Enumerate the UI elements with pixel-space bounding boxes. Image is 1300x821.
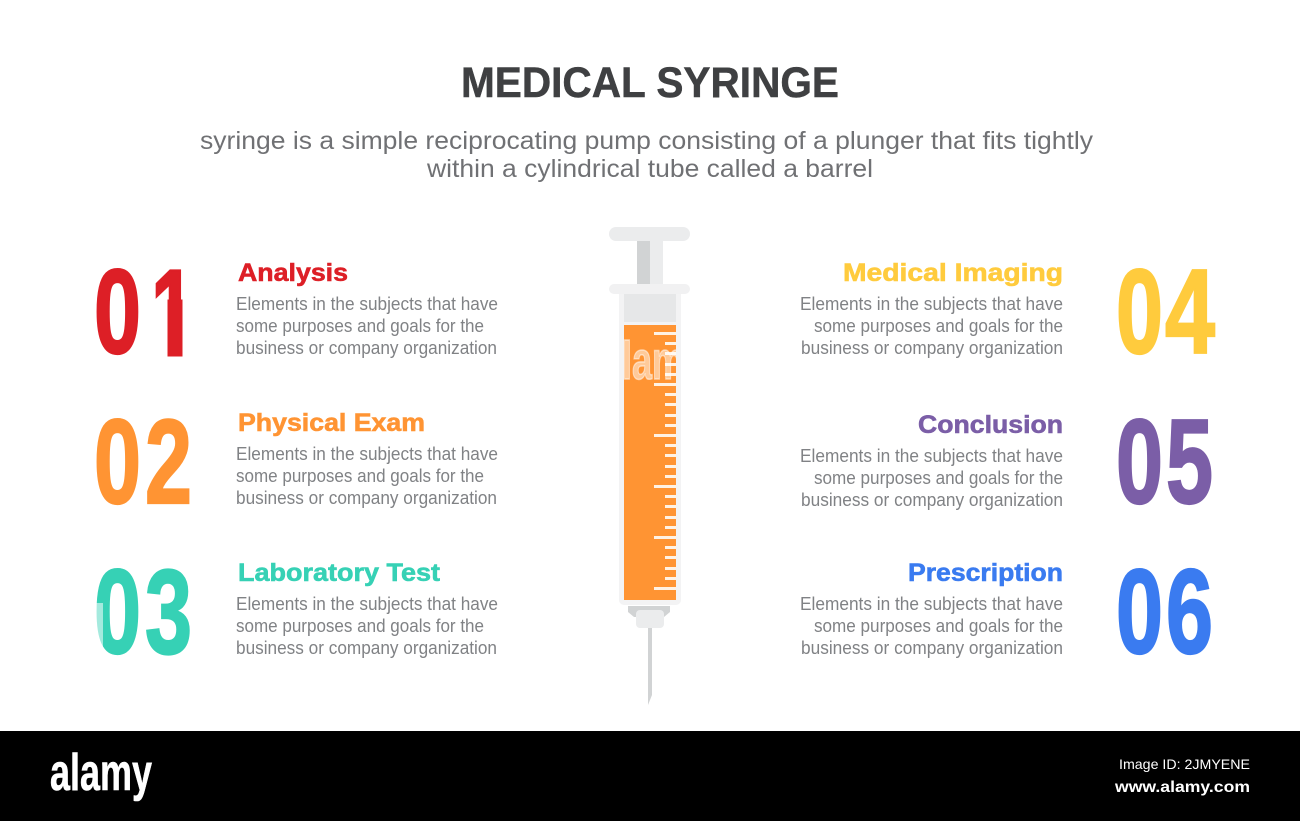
item 06: Prescription xyxy=(800,545,1213,679)
item 01: Analysis: Elements in the subjects that have xyxy=(236,293,498,314)
item 01: Analysis: business or company organization xyxy=(236,337,497,358)
item 02: Physical Exam: 0 xyxy=(94,395,141,529)
barrel flange xyxy=(609,284,690,294)
item 01: Analysis: 0 xyxy=(94,245,141,379)
item 02: Physical Exam: 2 xyxy=(145,395,192,529)
item 06: Prescription: 6 xyxy=(1166,545,1213,679)
item 04: Medical Imaging: 4 xyxy=(1165,245,1215,379)
item 06: Prescription: business or company organization xyxy=(801,637,1063,658)
item 04: Medical Imaging: 0 xyxy=(1116,245,1163,379)
item 05: Conclusion: some purposes and goals for the xyxy=(814,467,1063,488)
item 04: Medical Imaging: Elements in the subjects that have xyxy=(800,293,1063,314)
item 01: Analysis: Analysis xyxy=(238,259,348,287)
item 03: Laboratory Test: 3 xyxy=(145,545,192,679)
item 01: Analysis: 1 xyxy=(151,245,195,379)
footer bar xyxy=(0,731,1300,821)
item 05: Conclusion: Elements in the subjects that have xyxy=(800,445,1063,466)
item 06: Prescription: some purposes and goals for the xyxy=(814,615,1063,636)
icon: syringe xyxy=(609,227,690,705)
item 02: Physical Exam: business or company organization xyxy=(236,487,497,508)
item 02: Physical Exam: some purposes and goals for the xyxy=(236,465,484,486)
plunger seal xyxy=(624,294,676,322)
alamy logo: alamy xyxy=(50,744,152,802)
item 06: Prescription: Elements in the subjects that have xyxy=(800,593,1063,614)
item 06: Prescription: 0 xyxy=(1116,545,1163,679)
needle xyxy=(648,625,652,705)
item 03: Laboratory Test: Elements in the subjects that have xyxy=(236,593,498,614)
subtitle xyxy=(200,127,1094,183)
item 03: Laboratory Test: 0 xyxy=(94,545,141,679)
item 04: Medical Imaging: some purposes and goals for the xyxy=(814,315,1063,336)
barrel xyxy=(619,294,681,605)
website: www.alamy.com xyxy=(1114,779,1250,796)
item 06: Prescription: Prescription xyxy=(908,559,1063,587)
item 03: Laboratory Test xyxy=(94,545,498,679)
plunger rod xyxy=(637,240,663,285)
item 04: Medical Imaging xyxy=(800,245,1215,379)
item 05: Conclusion: 5 xyxy=(1166,395,1213,529)
item 01: Analysis xyxy=(96,262,498,358)
item 05: Conclusion: 0 xyxy=(1116,395,1163,529)
item 01: Analysis: some purposes and goals for the xyxy=(236,315,484,336)
item 02: Physical Exam: Physical Exam xyxy=(238,409,425,437)
subtitle: within a cylindrical tube called a barrel xyxy=(426,155,873,183)
item 03: Laboratory Test: business or company organization xyxy=(236,637,497,658)
needle hub xyxy=(628,606,670,628)
item 03: Laboratory Test: some purposes and goals for the xyxy=(236,615,484,636)
item 02: Physical Exam xyxy=(94,395,498,529)
title: MEDICAL SYRINGE xyxy=(461,59,839,107)
watermark on syringe: lam xyxy=(622,331,684,391)
item 05: Conclusion: business or company organization xyxy=(801,489,1063,510)
item 04: Medical Imaging: business or company organization xyxy=(801,337,1063,358)
subtitle: syringe is a simple reciprocating pump consisting of a plunger that fits tightly xyxy=(200,127,1094,155)
item 02: Physical Exam: Elements in the subjects that have xyxy=(236,443,498,464)
medicine fill xyxy=(624,325,676,600)
item 05: Conclusion xyxy=(800,395,1213,529)
item 05: Conclusion: Conclusion xyxy=(918,411,1063,439)
scale ticks xyxy=(654,332,676,590)
item 03: Laboratory Test: Laboratory Test xyxy=(238,559,441,587)
item 04: Medical Imaging: Medical Imaging xyxy=(843,259,1063,287)
plunger handle xyxy=(609,227,690,241)
image id: Image ID: 2JMYENE xyxy=(1119,756,1250,772)
